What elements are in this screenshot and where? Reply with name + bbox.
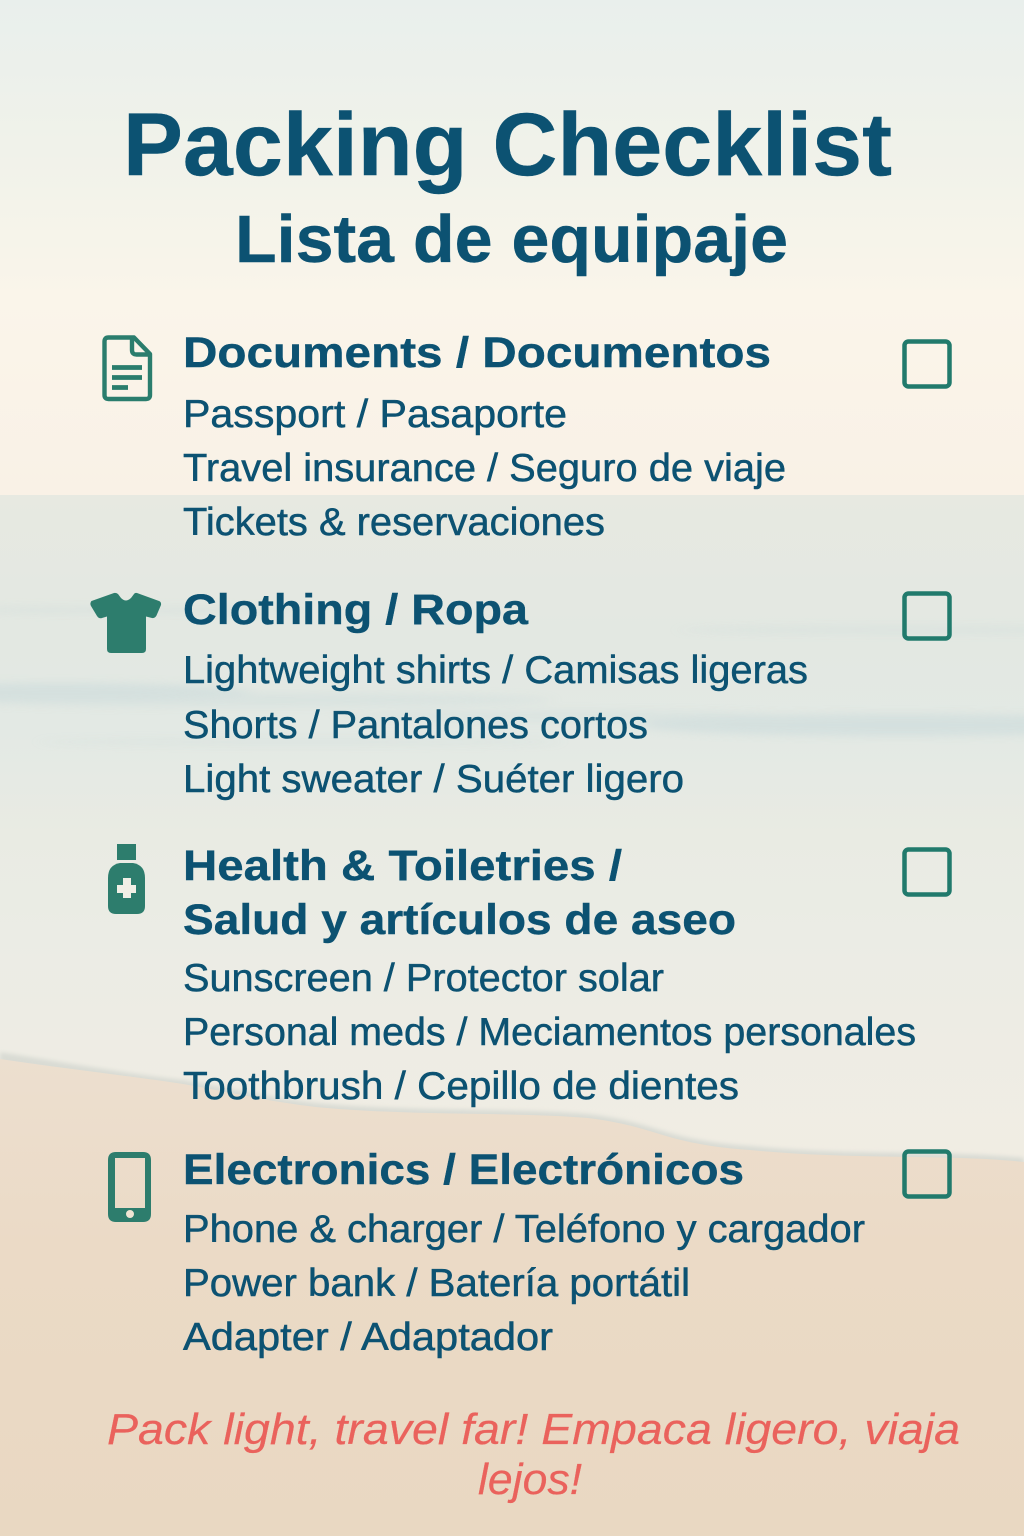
heading: electronics: Electronics / Electrónicos <box>183 1146 744 1194</box>
footer slogan: lejos! <box>478 1455 582 1504</box>
subtitle: Lista de equipaje <box>235 202 788 277</box>
item: shorts: Shorts / Pantalones cortos <box>183 704 648 747</box>
icon: phone <box>108 1152 151 1222</box>
item: adapter: Adapter / Adaptador <box>183 1316 553 1359</box>
item: power bank: Power bank / Batería portátil <box>183 1262 690 1305</box>
icon: t-shirt <box>90 593 161 653</box>
heading: clothing: Clothing / Ropa <box>183 586 529 634</box>
footer slogan <box>107 1405 960 1504</box>
item: phone: Phone & charger / Teléfono y cargador <box>183 1208 865 1251</box>
panel: clothing <box>90 586 950 801</box>
item: passport: Passport / Pasaporte <box>183 393 567 436</box>
item: personal meds: Personal meds / Meciamentos personales <box>183 1011 916 1054</box>
heading: documents: Documents / Documentos <box>183 329 771 377</box>
item: sunscreen: Sunscreen / Protector solar <box>183 957 664 1000</box>
checkbox: electronics <box>904 1152 950 1196</box>
item: shirts: Lightweight shirts / Camisas ligeras <box>183 649 808 692</box>
item: tickets: Tickets & reservaciones <box>183 501 605 544</box>
checkbox: clothing <box>904 594 950 638</box>
panel: health <box>108 842 950 1108</box>
footer slogan: Pack light, travel far! Empaca ligero, viaja <box>107 1405 960 1454</box>
heading: health line 2: Salud y artículos de aseo <box>183 896 736 944</box>
item: sweater: Light sweater / Suéter ligero <box>183 758 684 801</box>
checkbox: documents <box>904 342 950 386</box>
icon: document <box>104 338 150 399</box>
title: Packing Checklist <box>123 94 892 194</box>
item: travel insurance: Travel insurance / Seguro de viaje <box>183 447 786 490</box>
item: toothbrush: Toothbrush / Cepillo de dientes <box>183 1065 739 1108</box>
panel: documents <box>104 329 950 544</box>
panel: electronics <box>108 1146 950 1359</box>
icon: medicine bottle <box>108 844 145 914</box>
heading: health line 1: Health & Toiletries / <box>183 842 622 890</box>
checkbox: health <box>904 850 950 894</box>
